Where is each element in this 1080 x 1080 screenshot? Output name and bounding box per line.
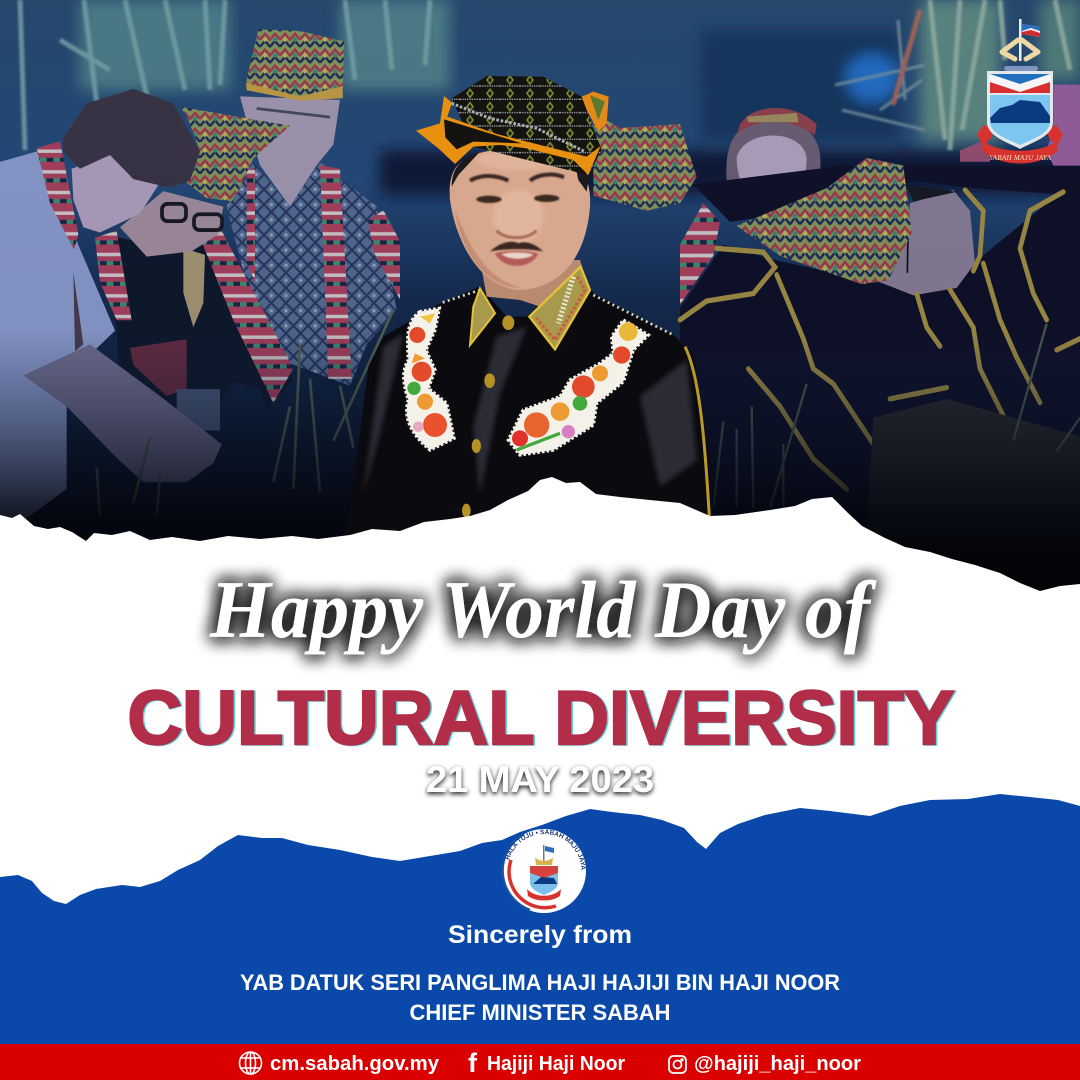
heading: Cultural Diversity: CULTURAL DIVERSITY	[129, 676, 956, 762]
figure: woman in background	[726, 108, 820, 214]
embroidery: left panel	[404, 308, 454, 450]
embroidery: right panel	[508, 320, 648, 455]
beaded shoulder line	[440, 290, 673, 335]
flag and pole	[1019, 19, 1040, 61]
icon: instagram	[669, 1056, 686, 1073]
logo: Hala Tuju Sabah Maju Jaya	[502, 829, 586, 913]
heading: Happy World Day of: Happy World Day of	[209, 564, 877, 655]
figure: far-right bowing man	[737, 158, 975, 295]
text: title of Chief Minister: CHIEF MINISTER SABAH	[410, 1000, 670, 1025]
footer bar	[0, 1044, 1080, 1080]
stage dark band	[693, 166, 1080, 222]
collar	[470, 267, 590, 349]
background photo: cultural ceremony crowd	[0, 0, 1080, 600]
hair	[452, 152, 589, 192]
eyes and eyebrows	[470, 175, 564, 238]
text: website: cm.sabah.gov.my	[270, 1053, 440, 1075]
torn white paper band	[0, 477, 1080, 900]
shield	[987, 71, 1053, 149]
figure: woman on left	[0, 89, 222, 537]
text: facebook name: Hajiji Haji Noor	[487, 1053, 625, 1075]
text: name of Chief Minister: YAB DATUK SERI PANGLIMA HAJI HAJIJI BIN HAJI NOOR	[240, 970, 840, 995]
torn blue paper band	[0, 794, 1080, 1044]
neck and face	[450, 148, 590, 307]
main portrait: Chief Minister in traditional dress	[345, 76, 713, 540]
heading: Cultural Diversity: CULTURAL DIVERSITY	[128, 676, 954, 761]
dark vertical fade	[0, 0, 1080, 600]
figure: black costumes	[680, 184, 1080, 527]
text: Sincerely from: Sincerely from	[448, 921, 632, 949]
text: instagram handle: @hajiji_haji_noor	[694, 1053, 861, 1075]
hands holding pole	[1002, 40, 1038, 59]
figure: man right of centre hat	[593, 113, 697, 211]
crowd figures: right side	[593, 85, 1080, 538]
crowd figures: left side	[0, 29, 400, 537]
gold buttons	[462, 315, 514, 518]
icon: facebook: f	[468, 1048, 478, 1078]
icon: globe	[240, 1052, 262, 1074]
figure: bowing man with glasses	[95, 107, 293, 434]
logo: Hala Tuju Sabah Maju Jaya: HALA TUJU • SABAH MAJU JAYA	[505, 830, 586, 870]
gold side trim	[685, 347, 709, 517]
jacket	[345, 267, 713, 540]
headdress: songket wrap	[416, 76, 609, 175]
rice plants	[97, 310, 393, 517]
gold costume trims	[680, 190, 1080, 489]
date: 21 MAY 2023	[426, 759, 654, 800]
figure: pink hat behind crest	[1047, 85, 1080, 188]
jacket sheen	[363, 327, 697, 493]
rice plants and hands	[713, 324, 1080, 538]
figure: standing man with hat	[227, 29, 400, 386]
motto ribbon: SABAH MAJU JAYA	[989, 154, 1052, 162]
motto ribbon	[977, 125, 1063, 164]
lower band of photo	[780, 538, 1080, 600]
moustache and smile	[490, 242, 543, 266]
crest: Sabah coat of arms	[977, 19, 1063, 164]
stage plants and lights	[20, 0, 1080, 195]
